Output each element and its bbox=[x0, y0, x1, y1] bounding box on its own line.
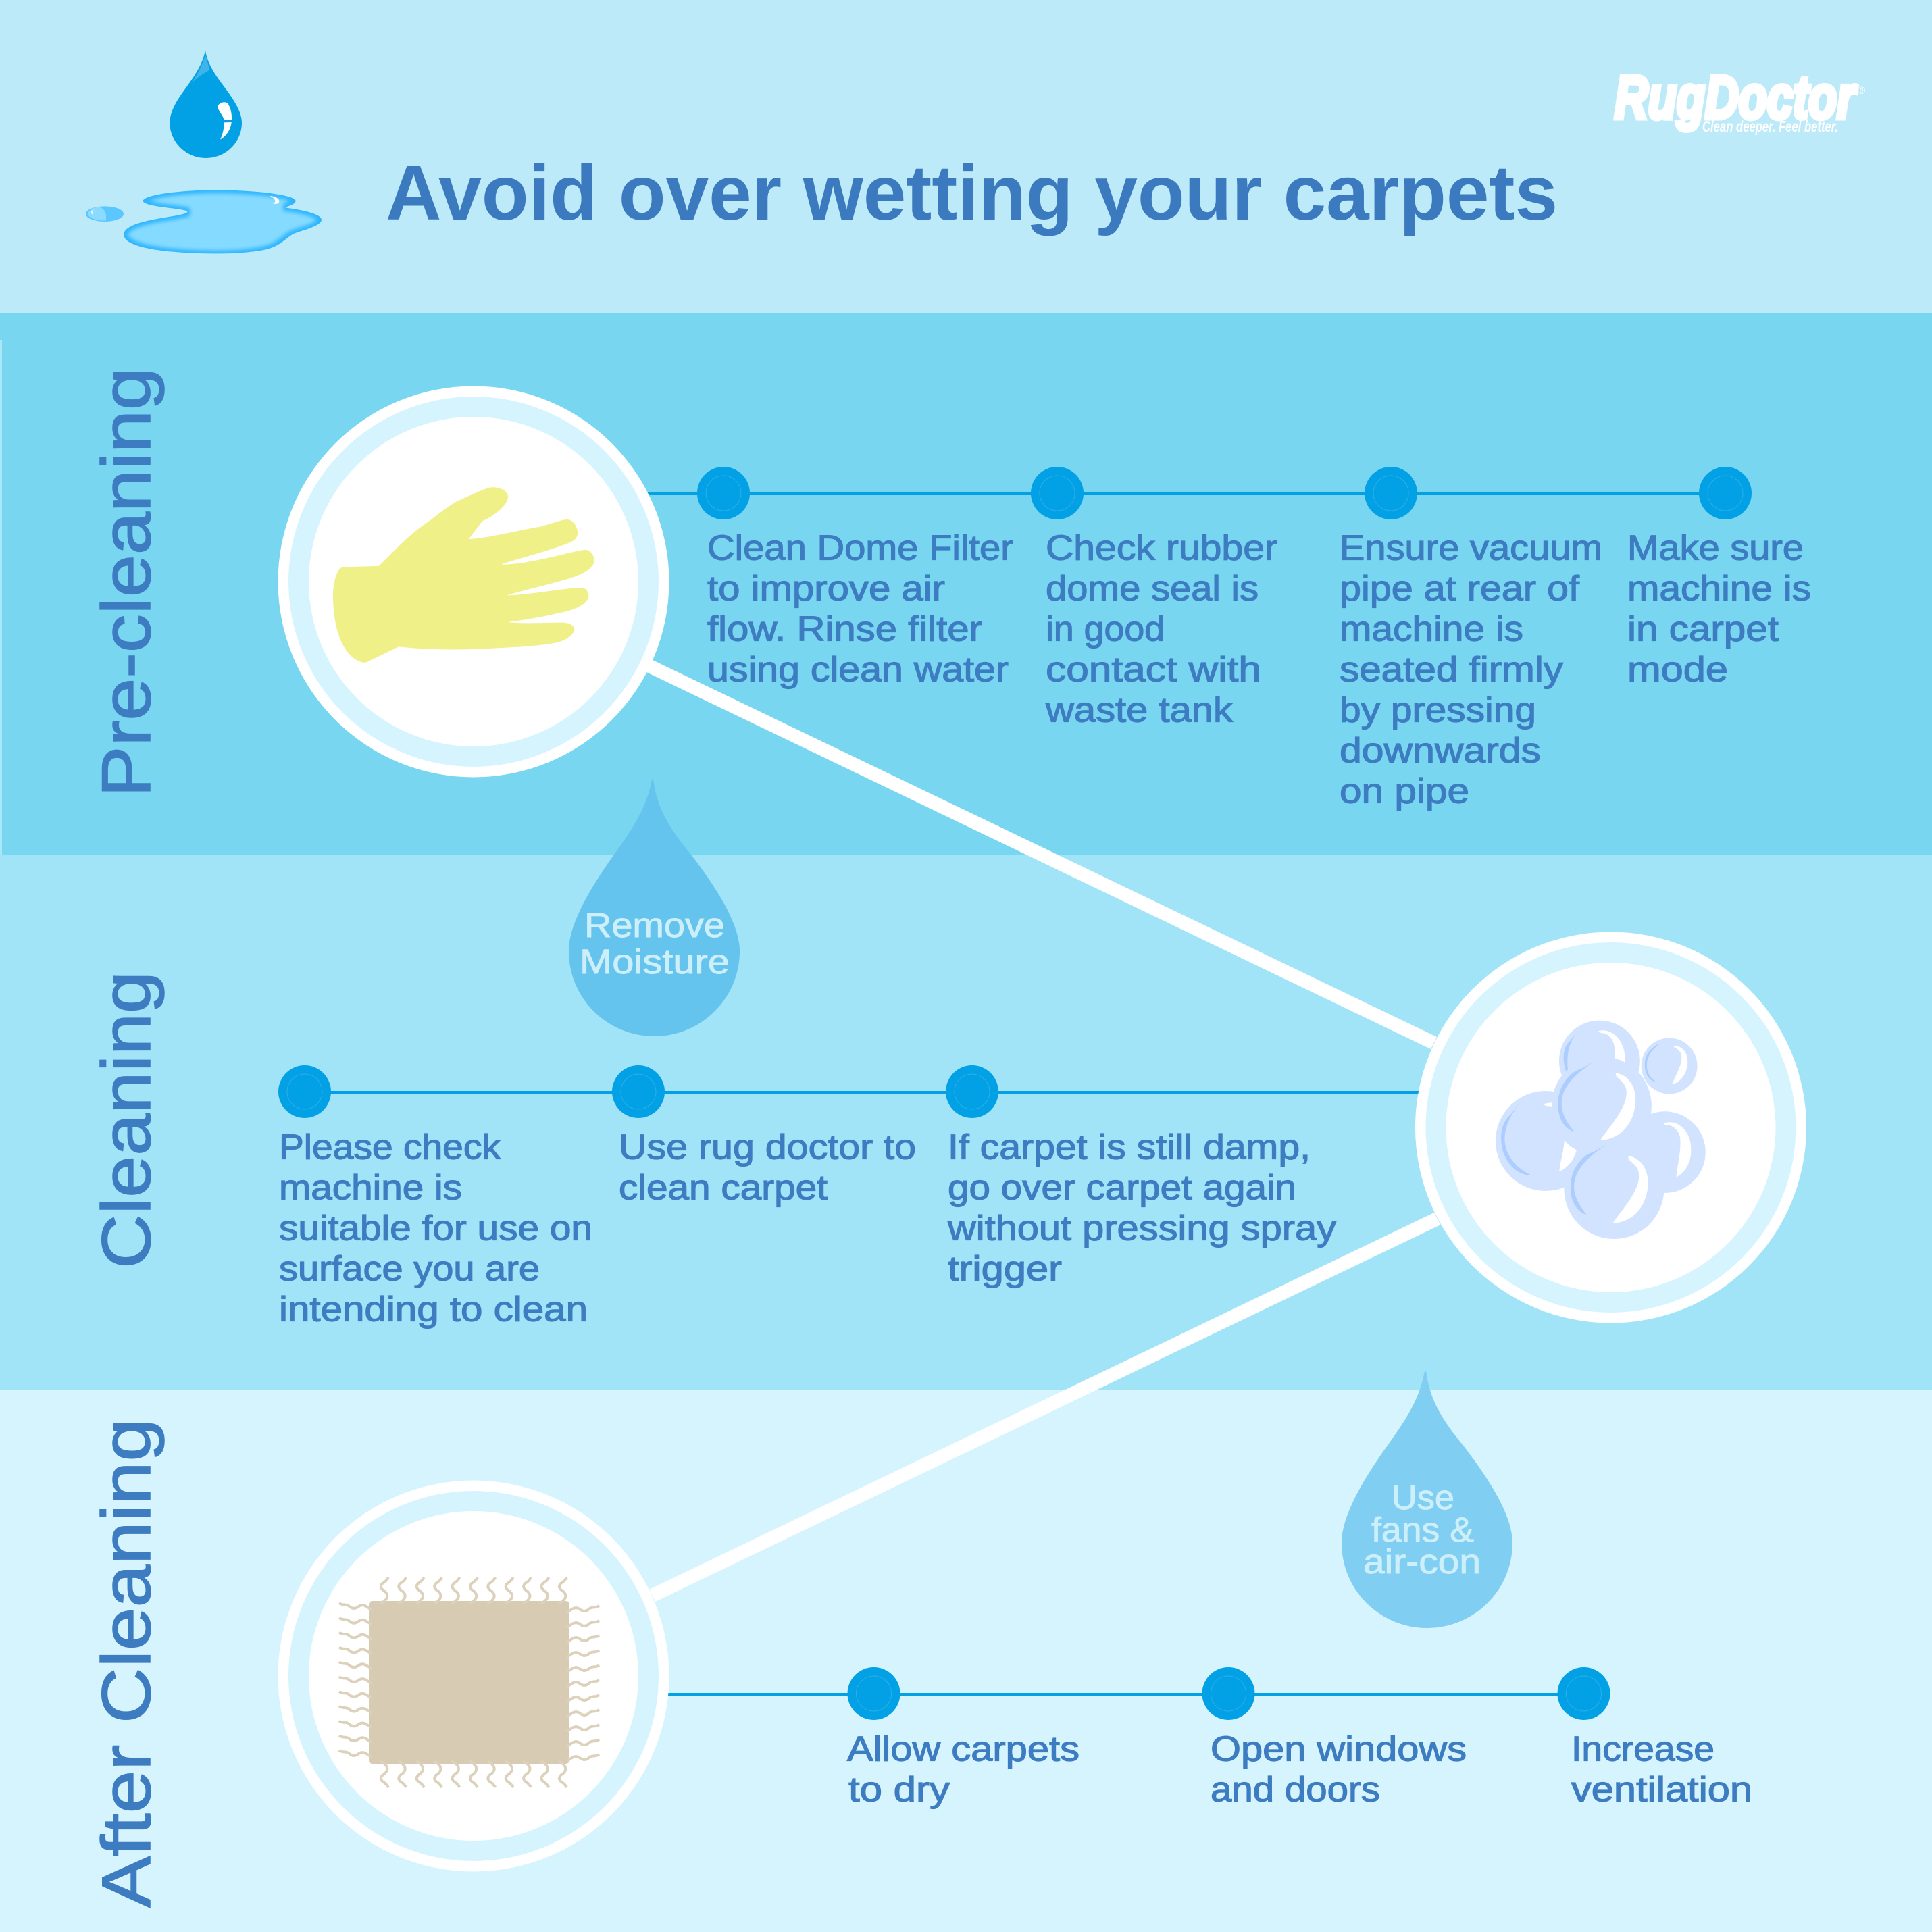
heading: Cleaning: Cleaning bbox=[88, 971, 165, 1269]
text: check rubber dome seal: dome seal is bbox=[1046, 569, 1259, 608]
text: check machine suitable bbox=[279, 1128, 592, 1329]
text: carpet mode: in carpet bbox=[1627, 609, 1779, 649]
text: open windows and doors: and doors bbox=[1211, 1770, 1380, 1809]
text: ensure vacuum pipe: by pressing bbox=[1340, 690, 1536, 730]
text: open windows and doors bbox=[1211, 1729, 1467, 1809]
text: ensure vacuum pipe: on pipe bbox=[1340, 771, 1469, 811]
panel: after cleaning bbox=[0, 1390, 1932, 1932]
panel: header bbox=[0, 0, 1932, 313]
callout: remove moisture bbox=[569, 779, 740, 1036]
text: ensure vacuum pipe: Ensure vacuum bbox=[1340, 528, 1602, 567]
text: check rubber dome seal: contact with bbox=[1046, 650, 1261, 689]
text: check machine suitable: intending to clean bbox=[279, 1290, 588, 1329]
text: check rubber dome seal bbox=[1045, 528, 1277, 730]
text: carpet still damp: without pressing spray bbox=[947, 1209, 1336, 1248]
text: check rubber dome seal: waste tank bbox=[1045, 690, 1234, 730]
text: check machine suitable: machine is bbox=[279, 1169, 462, 1208]
logo: Rug Doctor: Clean deeper. Feel better. bbox=[1702, 118, 1838, 135]
text: carpet mode bbox=[1627, 528, 1811, 689]
text: increase ventilation bbox=[1571, 1729, 1752, 1809]
text: carpet mode: Make sure bbox=[1627, 528, 1804, 567]
connector: carpet to bubbles bbox=[649, 1213, 1440, 1602]
timeline: after cleaning steps bbox=[665, 1667, 1610, 1720]
icon: water puddle bbox=[86, 190, 322, 253]
callout: use fans and air-con bbox=[1342, 1371, 1512, 1628]
text: carpet still damp bbox=[947, 1128, 1336, 1289]
heading: After Cleaning: After Cleaning bbox=[88, 1419, 165, 1908]
text: allow carpets to dry: to dry bbox=[848, 1770, 950, 1809]
text: carpet mode: mode bbox=[1627, 650, 1728, 689]
panel: cleaning bbox=[0, 855, 1932, 1390]
text: ensure vacuum pipe: pipe at rear of bbox=[1340, 569, 1580, 608]
text: clean dome filter: to improve air bbox=[707, 569, 945, 608]
text: allow carpets to dry: Allow carpets bbox=[847, 1729, 1079, 1769]
text: increase ventilation: Increase bbox=[1571, 1729, 1714, 1769]
text: check machine suitable: Please check bbox=[279, 1128, 501, 1167]
text: ensure vacuum pipe: downwards bbox=[1340, 731, 1541, 770]
icon: carpet in circle bbox=[278, 1481, 669, 1871]
heading: Pre-cleaning: Pre-cleaning bbox=[88, 367, 165, 797]
logo: Rug Doctor: ® bbox=[1858, 85, 1865, 97]
text: ensure vacuum pipe bbox=[1340, 528, 1602, 811]
timeline: cleaning steps bbox=[278, 1065, 1426, 1118]
callout: use fans and air-con: air-con bbox=[1363, 1542, 1481, 1581]
callout: remove moisture: Moisture bbox=[580, 942, 730, 981]
callout: use fans and air-con: fans & bbox=[1371, 1510, 1474, 1549]
text: clean dome filter bbox=[707, 528, 1013, 689]
text: carpet mode: machine is bbox=[1627, 569, 1811, 608]
text: check rubber dome seal: Check rubber bbox=[1046, 528, 1277, 567]
text: use rug doctor: clean carpet bbox=[619, 1169, 828, 1208]
text: clean dome filter: Clean Dome Filter bbox=[707, 528, 1013, 567]
text: open windows and doors: Open windows bbox=[1211, 1729, 1467, 1769]
text: check machine suitable: suitable for use on bbox=[279, 1209, 592, 1248]
title: Avoid over wetting your carpets bbox=[386, 150, 1558, 236]
icon: bubbles in circle bbox=[1415, 932, 1806, 1323]
timeline: pre-cleaning steps bbox=[645, 467, 1752, 519]
connector: glove to bubbles bbox=[646, 660, 1437, 1049]
text: carpet still damp: If carpet is still damp, bbox=[948, 1128, 1311, 1167]
text: allow carpets to dry bbox=[847, 1729, 1079, 1809]
text: use rug doctor: Use rug doctor to bbox=[619, 1128, 916, 1167]
callout: use fans and air-con: Use bbox=[1392, 1478, 1454, 1517]
icon: glove in circle bbox=[278, 386, 669, 777]
text: increase ventilation: ventilation bbox=[1571, 1770, 1752, 1809]
panel: pre-cleaning bbox=[0, 313, 1932, 855]
callout: remove moisture: Remove bbox=[584, 906, 725, 944]
text: ensure vacuum pipe: machine is bbox=[1340, 609, 1523, 649]
text: use rug doctor bbox=[619, 1128, 916, 1208]
text: check machine suitable: surface you are bbox=[279, 1250, 540, 1289]
text: clean dome filter: flow. Rinse filter bbox=[707, 609, 982, 649]
text: check rubber dome seal: in good bbox=[1046, 609, 1165, 649]
logo: Rug Doctor: RugDoctor bbox=[1615, 64, 1858, 132]
text: ensure vacuum pipe: seated firmly bbox=[1340, 650, 1563, 689]
text: carpet still damp: trigger bbox=[948, 1250, 1062, 1289]
text: carpet still damp: go over carpet again bbox=[948, 1169, 1296, 1208]
icon: water drop bbox=[170, 50, 242, 158]
text: clean dome filter: using clean water bbox=[707, 650, 1009, 689]
